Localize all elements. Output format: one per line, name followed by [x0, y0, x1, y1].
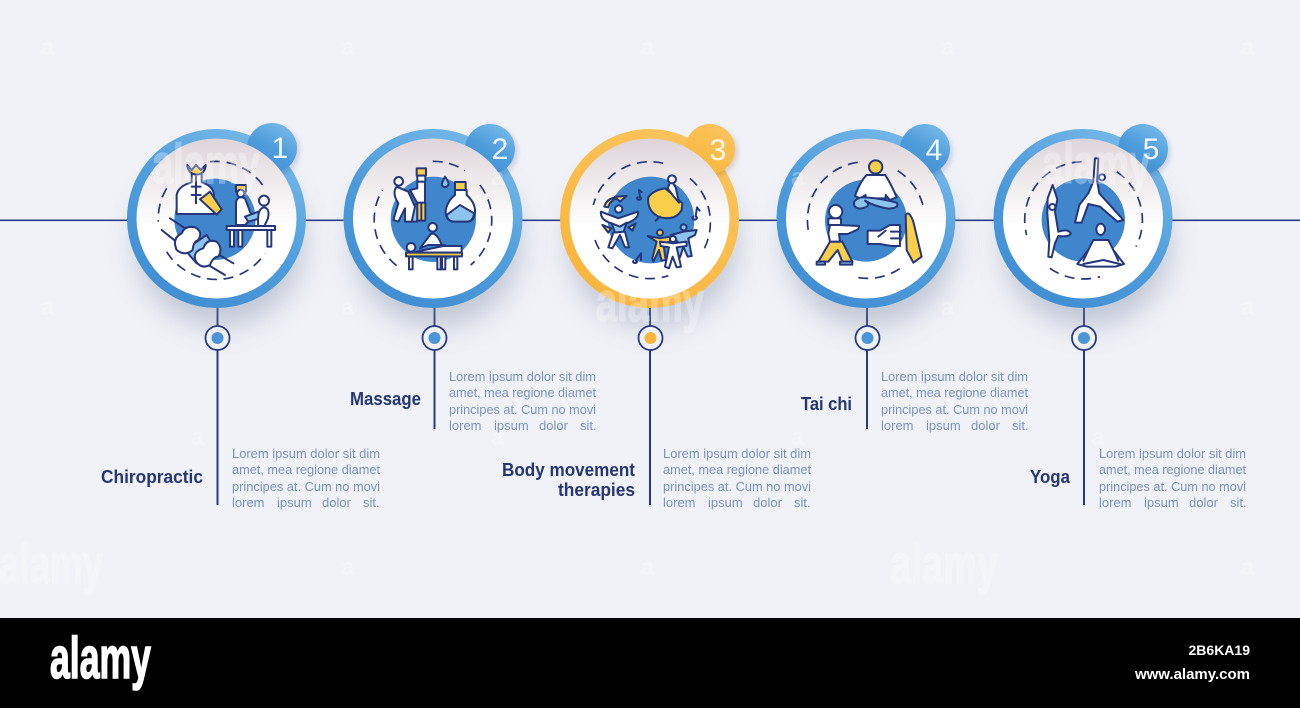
- image id: 2B6KA19: [1189, 642, 1250, 658]
- text block 1: Lorem ipsum dolor sit dim: [232, 446, 380, 461]
- text block 2: lorem: [449, 418, 482, 433]
- text block 1: sit.: [363, 495, 380, 510]
- step 4: Tai chi: [776, 124, 1032, 433]
- text block 3: dolor: [753, 495, 783, 510]
- step 3: Body movement therapies: [502, 124, 815, 510]
- watermarks: a: [641, 554, 655, 581]
- ring 5: [994, 124, 1172, 327]
- watermarks: [0, 34, 1255, 595]
- icon: tai chi: [807, 160, 923, 278]
- icon: dance: [593, 162, 710, 279]
- heading: Body movement therapies: therapies: [558, 480, 635, 500]
- watermarks: alamy: [596, 270, 704, 333]
- number 1: 1: [272, 132, 288, 165]
- ring 3: [560, 124, 739, 327]
- footer logo: alamy: [50, 626, 151, 691]
- ring 4: [776, 124, 956, 327]
- watermarks: a: [491, 424, 505, 451]
- connector 1: [216, 305, 218, 505]
- text block 2: ipsum: [494, 418, 529, 433]
- footer bar: [0, 618, 1300, 708]
- text block 4: lorem: [881, 418, 914, 433]
- watermarks: a: [641, 34, 655, 61]
- watermarks: alamy: [1042, 132, 1150, 195]
- watermarks: a: [791, 424, 805, 451]
- text block 3: principes at. Cum no movi: [663, 479, 811, 494]
- node 5: [1072, 326, 1096, 350]
- watermarks: a: [41, 294, 55, 321]
- text block 5: sit.: [1230, 495, 1247, 510]
- number 4: 4: [926, 134, 942, 167]
- text block 3: lorem: [663, 495, 696, 510]
- watermarks: a: [941, 294, 955, 321]
- watermarks: a: [1091, 424, 1105, 451]
- text block 3: ipsum: [708, 495, 743, 510]
- text block 1: amet, mea regione diamet: [232, 462, 380, 477]
- watermarks: alamy: [152, 132, 260, 195]
- text block 2: amet, mea regione diamet: [449, 385, 596, 400]
- watermarks: a: [491, 164, 505, 191]
- number 3: 3: [710, 134, 726, 167]
- watermarks: a: [1241, 34, 1255, 61]
- watermarks: alamy: [890, 532, 998, 595]
- number 2: 2: [492, 133, 508, 166]
- step 1: Chiropractic: [101, 123, 384, 510]
- text block 3: sit.: [794, 495, 811, 510]
- text block 2: dolor: [539, 418, 569, 433]
- node 2: [422, 326, 446, 350]
- heading: Body movement therapies: Body movement: [502, 460, 635, 480]
- text block 5: dolor: [1189, 495, 1219, 510]
- text block 5: ipsum: [1144, 495, 1179, 510]
- heading: Massage: Massage: [350, 389, 421, 409]
- text block 4: sit.: [1012, 418, 1029, 433]
- node 1: [206, 326, 230, 350]
- watermarks: a: [1241, 554, 1255, 581]
- text block 1: principes at. Cum no movi: [232, 479, 380, 494]
- ring 2: [344, 124, 522, 327]
- horizontal timeline line: [0, 220, 1300, 221]
- watermarks: a: [341, 294, 355, 321]
- text block 5: amet, mea regione diamet: [1099, 462, 1246, 477]
- icon: massage: [374, 161, 492, 269]
- text block 1: dolor: [322, 495, 352, 510]
- icon: chiropractic: [158, 161, 275, 279]
- text block 4: amet, mea regione diamet: [881, 385, 1028, 400]
- text block 5: lorem: [1099, 495, 1132, 510]
- step 2: Massage: [344, 124, 600, 433]
- text block 3: Lorem ipsum dolor sit dim: [663, 446, 811, 461]
- step 5: Yoga: [994, 124, 1250, 510]
- number 5: 5: [1143, 133, 1159, 166]
- connector 4: [866, 305, 868, 429]
- node 3: [638, 326, 662, 350]
- text block 4: Lorem ipsum dolor sit dim: [881, 369, 1028, 384]
- heading: Yoga: Yoga: [1030, 467, 1071, 487]
- watermarks: a: [791, 164, 805, 191]
- watermarks: a: [341, 34, 355, 61]
- text block 5: principes at. Cum no movi: [1099, 479, 1246, 494]
- ring 1: [127, 123, 306, 327]
- website: www.alamy.com: [1134, 666, 1250, 683]
- text block 4: ipsum: [926, 418, 961, 433]
- text block 1: ipsum: [277, 495, 312, 510]
- text block 2: sit.: [580, 418, 597, 433]
- text block 4: dolor: [971, 418, 1001, 433]
- icon: yoga: [1025, 158, 1142, 279]
- connector 3: [649, 305, 651, 505]
- watermarks: a: [191, 424, 205, 451]
- text block 1: lorem: [232, 495, 265, 510]
- text block 3: amet, mea regione diamet: [663, 462, 811, 477]
- connector 5: [1083, 305, 1085, 505]
- watermarks: a: [1241, 294, 1255, 321]
- watermarks: a: [41, 34, 55, 61]
- text block 2: Lorem ipsum dolor sit dim: [449, 369, 596, 384]
- text block 2: principes at. Cum no movi: [449, 402, 596, 417]
- connector 2: [434, 305, 436, 429]
- text block 5: Lorem ipsum dolor sit dim: [1099, 446, 1246, 461]
- node 4: [856, 326, 880, 350]
- text block 4: principes at. Cum no movi: [881, 402, 1028, 417]
- watermarks: alamy: [0, 532, 103, 595]
- heading: Tai chi: Tai chi: [801, 394, 852, 414]
- watermarks: a: [341, 554, 355, 581]
- heading: Chiropractic: Chiropractic: [101, 467, 203, 487]
- watermarks: a: [941, 34, 955, 61]
